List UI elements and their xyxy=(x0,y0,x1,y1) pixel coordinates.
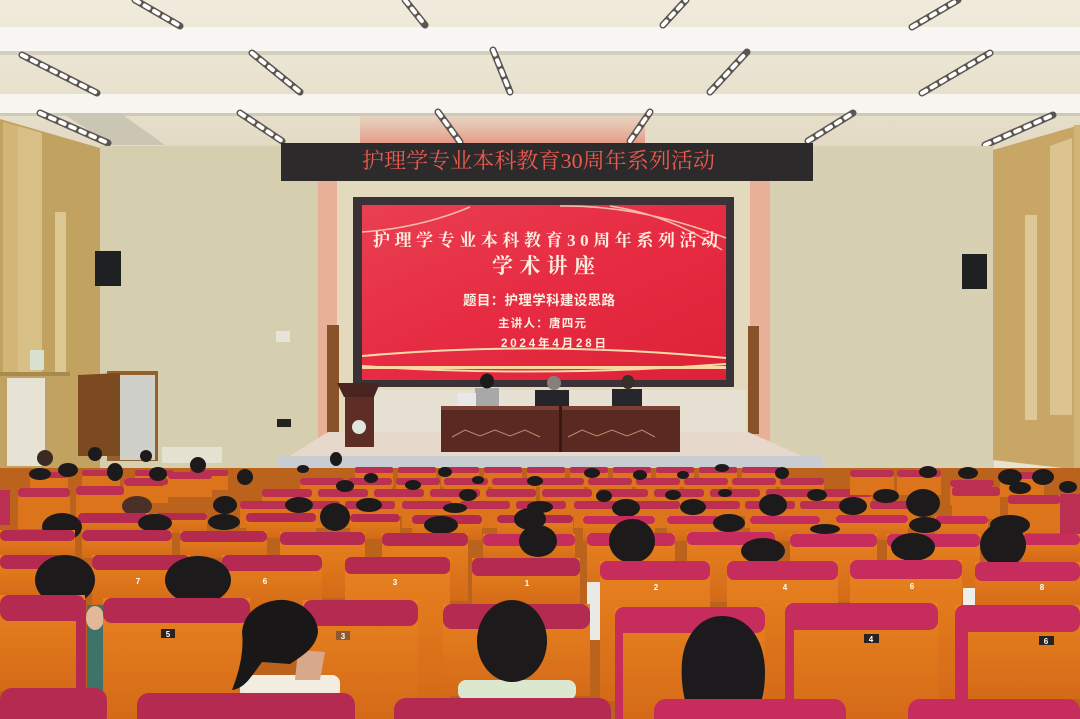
front audience: woman with long hair xyxy=(682,616,765,704)
seat numbers: 6 xyxy=(1044,637,1049,646)
ceiling lights xyxy=(22,0,1053,145)
seat numbers xyxy=(161,629,1054,646)
speakers on stage xyxy=(458,374,642,407)
front audience: woman with braid xyxy=(232,600,340,699)
top banner xyxy=(281,143,813,181)
screen title: 护理学专业本科教育30周年系列活动 xyxy=(373,230,718,250)
seating base xyxy=(0,468,1080,719)
screen subtitle: 学术讲座 xyxy=(492,254,596,278)
loudspeakers xyxy=(95,251,987,289)
seat row E xyxy=(78,513,988,541)
seat row B xyxy=(0,595,1080,719)
seat numbers: 7 xyxy=(136,577,141,586)
seat numbers: 8 xyxy=(1040,583,1045,592)
heads before row C xyxy=(519,519,1026,640)
speaker: 主讲人：唐四元 xyxy=(498,316,586,330)
heads before row D xyxy=(42,489,1030,541)
heads before row B xyxy=(35,555,231,695)
date: 2024年4月28日 xyxy=(501,336,606,350)
seat numbers: 3 xyxy=(341,632,346,641)
seat numbers: 4 xyxy=(869,635,874,644)
back wall xyxy=(100,146,994,490)
front crimson seat tops xyxy=(0,688,1080,719)
stage desk xyxy=(441,406,680,452)
top banner: 护理学专业本科教育30周年系列活动 xyxy=(362,149,715,173)
seat numbers: 3 xyxy=(393,578,398,587)
seat numbers: 1 xyxy=(525,579,530,588)
seat numbers: 2 xyxy=(654,583,659,592)
back audience heads xyxy=(29,447,1077,517)
left side wall and doors xyxy=(0,119,158,470)
ceiling xyxy=(0,0,1080,150)
projection screen xyxy=(353,197,734,387)
front audience: woman with bun xyxy=(458,600,576,700)
seat row C xyxy=(0,555,1080,702)
lectern xyxy=(337,383,380,447)
right side wall xyxy=(993,125,1080,470)
seat numbers: 6 xyxy=(263,577,268,586)
seat numbers: 6 xyxy=(910,582,915,591)
lecture topic: 题目：护理学科建设思路 xyxy=(463,292,616,308)
stage xyxy=(278,432,823,476)
back seat rows xyxy=(0,467,1080,534)
seat numbers: 5 xyxy=(166,630,171,639)
seat row D xyxy=(0,530,1080,603)
seat numbers: 4 xyxy=(783,583,788,592)
seat numbers xyxy=(136,577,1045,592)
